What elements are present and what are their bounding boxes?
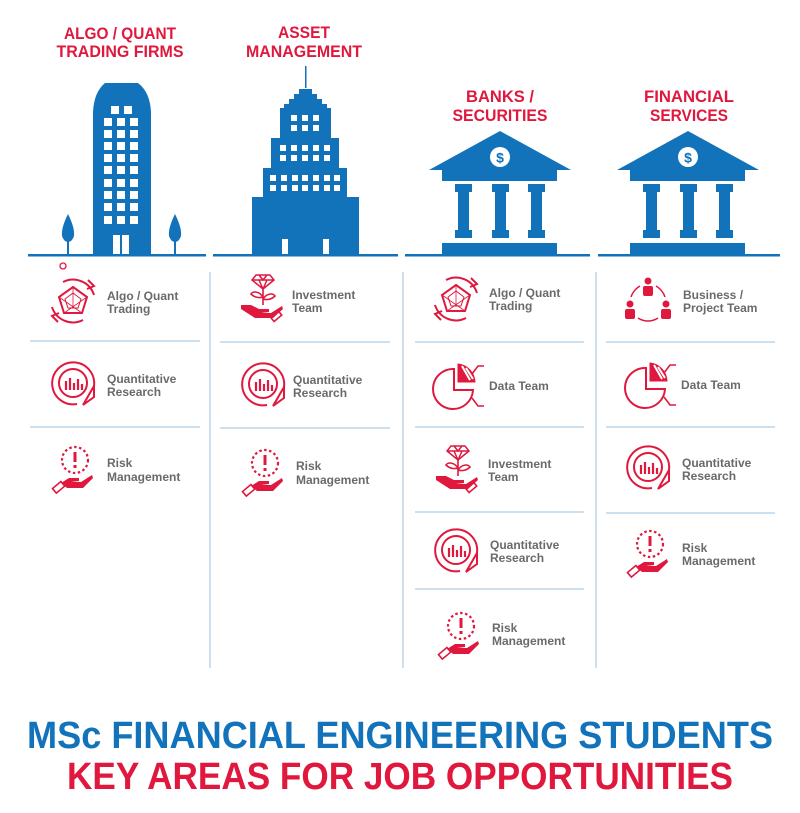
role: quantitative research: Research (490, 551, 544, 565)
building: bank: $ (496, 150, 504, 166)
role: risk management: Risk (107, 456, 133, 470)
role: investment team: Team (488, 470, 518, 484)
building: financial services (598, 131, 780, 256)
role: risk management (52, 447, 180, 493)
role: algo quant trading (435, 278, 560, 320)
role: risk management: Management (492, 634, 565, 648)
role: quantitative research: Research (107, 385, 161, 399)
role: investment team (436, 446, 551, 493)
title: main: KEY AREAS FOR JOB OPPORTUNITIES (67, 756, 733, 798)
role: investment team: Team (292, 301, 322, 315)
panel: banks securities roles (433, 278, 565, 659)
heading: banks securities: BANKS / (466, 87, 534, 106)
panel: algo quant trading firms roles (52, 280, 180, 493)
role: quantitative research (627, 446, 752, 489)
heading: banks securities: SECURITIES (452, 106, 548, 125)
heading: asset management: ASSET (278, 23, 331, 42)
panel: asset management roles (241, 275, 369, 496)
role: quantitative research: Quantitative (682, 456, 752, 470)
role: quantitative research (52, 362, 177, 405)
role: investment team: Investment (488, 457, 551, 471)
building: asset management skyscraper (213, 66, 398, 256)
role: quantitative research: Research (682, 469, 736, 483)
role: data team: Data Team (489, 379, 549, 393)
role: quantitative research (435, 529, 560, 572)
role: risk management: Risk (296, 459, 322, 473)
role: risk management (438, 613, 565, 659)
heading: asset management: MANAGEMENT (246, 42, 363, 61)
role: business project team: Business / (683, 288, 744, 302)
role: quantitative research: Research (293, 386, 347, 400)
title: main (27, 715, 773, 798)
role: investment team (241, 275, 355, 322)
heading: asset management (246, 23, 363, 61)
role: risk management: Risk (492, 621, 518, 635)
role: investment team: Investment (292, 288, 355, 302)
role: risk management: Risk (682, 541, 708, 555)
role: algo quant trading: Algo / Quant (489, 286, 560, 300)
role: business project team: Project Team (683, 301, 757, 315)
role: business project team (625, 278, 757, 321)
role: risk management: Management (682, 554, 755, 568)
heading: banks securities (452, 87, 548, 125)
heading: algo quant trading firms (56, 24, 184, 61)
building: algo tower with trees (28, 83, 206, 256)
building: bank (405, 131, 590, 256)
heading: algo quant trading firms: ALGO / QUANT (64, 24, 177, 43)
role: quantitative research: Quantitative (293, 373, 363, 387)
heading: financial services: FINANCIAL (644, 87, 734, 106)
role: risk management: Management (107, 470, 180, 484)
role: risk management (627, 531, 755, 577)
role: data team: Data Team (681, 378, 741, 392)
title: main: MSc FINANCIAL ENGINEERING STUDENTS (27, 715, 773, 757)
role: algo quant trading (52, 280, 178, 322)
heading: algo quant trading firms: TRADING FIRMS (56, 42, 184, 61)
role: data team (433, 364, 549, 409)
role: algo quant trading: Algo / Quant (107, 289, 178, 303)
panel: financial services roles (625, 278, 757, 577)
role: quantitative research: Quantitative (490, 538, 560, 552)
heading: financial services: SERVICES (650, 106, 728, 125)
role: quantitative research (242, 363, 363, 406)
role: algo quant trading: Trading (489, 299, 532, 313)
role: quantitative research: Quantitative (107, 372, 177, 386)
role: risk management (242, 450, 369, 496)
role: risk management: Management (296, 473, 369, 487)
role: algo quant trading: Trading (107, 302, 150, 316)
building: financial services: $ (684, 150, 692, 166)
role: data team (625, 363, 741, 408)
heading: financial services (644, 87, 734, 125)
